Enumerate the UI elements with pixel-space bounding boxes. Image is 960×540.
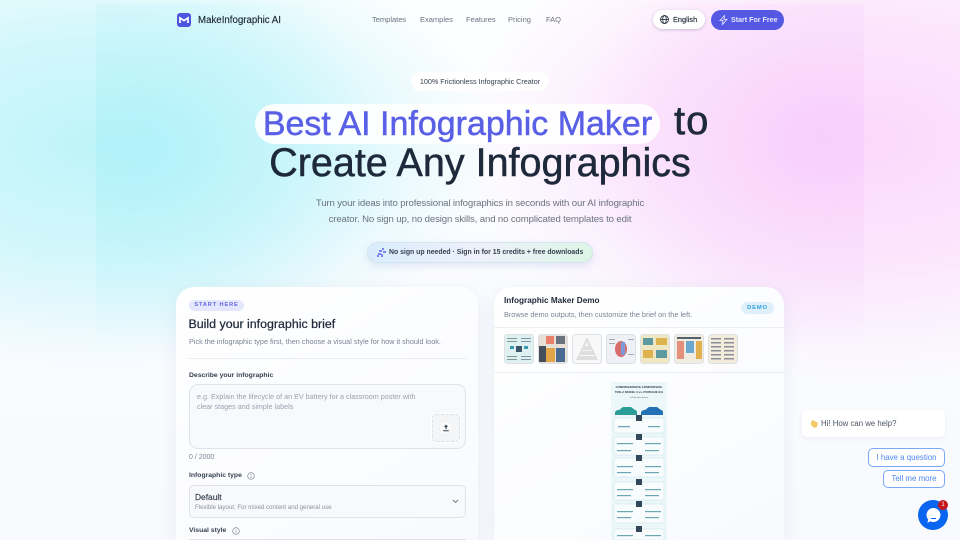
chat option: tell me more: Tell me more	[891, 474, 937, 483]
start here tag	[189, 300, 244, 311]
prompt textarea	[189, 384, 466, 449]
type label: Infographic type	[189, 472, 242, 479]
highlighted title phrase: Best AI Infographic Maker	[263, 105, 652, 143]
title: Create Any Infographics	[269, 141, 691, 185]
thumbnail 4	[606, 334, 636, 364]
icon: sparkles	[377, 248, 386, 257]
prompt textarea: e.g. Explain the lifecycle of an EV battery for a classroom poster with	[197, 392, 416, 401]
thumbnail 5	[640, 334, 670, 364]
demo infographic preview: In-Depth Spec Analysis	[630, 396, 648, 399]
icon: globe	[660, 15, 669, 24]
icon: waving hand	[811, 420, 818, 428]
panel: build brief	[176, 287, 478, 540]
badge: 100% Frictionless Infographic Creator	[420, 77, 540, 86]
chat option: question	[868, 448, 945, 467]
thumbnail strip	[504, 334, 738, 364]
sign-up notice pill	[367, 242, 593, 263]
section icons	[636, 415, 642, 532]
panel description: Pick the infographic type first, then choose a visual style for how it should look.	[189, 337, 441, 346]
character counter: 0 / 2000	[189, 454, 214, 461]
row accents	[617, 426, 661, 536]
thumbnail 2	[538, 334, 568, 364]
thumbnail 7	[708, 334, 738, 364]
subtitle	[316, 198, 644, 225]
nav links: FAQ	[546, 15, 561, 24]
comparison rows	[614, 418, 664, 540]
nav links: Pricing	[508, 15, 531, 24]
panel: demo	[494, 287, 784, 540]
demo infographic preview: COMPREHENSIVE COMPARISON:	[616, 385, 662, 389]
icon: chevron	[452, 500, 458, 503]
prompt textarea: clear stages and simple labels	[197, 402, 293, 411]
style label: Visual style	[189, 527, 226, 534]
demo infographic preview: TESLA MODEL 3 vs. PORSCHE 911	[615, 390, 664, 394]
language button: English	[673, 15, 697, 24]
chat greeting bubble	[802, 410, 945, 437]
prompt label: Describe your infographic	[189, 372, 273, 379]
thumbnail 3	[572, 334, 602, 364]
thumbnail 1	[504, 334, 534, 364]
icon: spark	[719, 15, 728, 25]
demo infographic preview	[611, 382, 667, 540]
start button: Start For Free	[731, 16, 778, 24]
type select	[189, 485, 466, 518]
car illustrations	[615, 407, 663, 415]
icon: info	[232, 527, 240, 535]
notification badge	[938, 500, 948, 510]
sign-up notice pill: No sign up needed · Sign in for 15 credits + free downloads	[389, 248, 583, 256]
type select: Default	[195, 492, 222, 502]
chat option: question: I have a question	[876, 453, 937, 462]
title: to	[674, 99, 709, 143]
navigation bar	[177, 10, 784, 32]
thumbnail 6	[674, 334, 704, 364]
title	[255, 99, 709, 185]
chat option: tell me more	[883, 470, 945, 488]
chat launcher	[918, 500, 948, 530]
demo tag	[741, 302, 774, 314]
start button	[711, 10, 784, 30]
icon: speech bubble	[926, 508, 940, 523]
notification badge: 1	[941, 502, 945, 508]
demo description: Browse demo outputs, then customize the brief on the left.	[504, 310, 692, 319]
logo icon	[177, 13, 191, 27]
demo heading: Infographic Maker Demo	[504, 296, 600, 305]
start here tag: START HERE	[194, 302, 239, 308]
type select: Flexible layout; For mixed content and general use	[195, 504, 332, 511]
brand name: MakeInfographic AI	[198, 14, 281, 26]
subtitle: creator. No sign up, no design skills, and no complicated templates to edit	[329, 214, 631, 225]
nav links: Examples	[420, 15, 453, 24]
upload button	[432, 414, 460, 442]
panel heading: Build your infographic brief	[188, 317, 335, 331]
subtitle: Turn your ideas into professional infographics in seconds with our AI infographic	[316, 198, 644, 209]
nav links: Templates	[372, 15, 406, 24]
icon: info	[247, 472, 255, 480]
icon: upload	[440, 422, 452, 434]
demo tag: DEMO	[747, 305, 768, 311]
nav links	[372, 15, 561, 24]
language button	[653, 10, 705, 29]
badge	[411, 72, 549, 91]
chat greeting bubble: Hi! How can we help?	[821, 419, 896, 428]
nav links: Features	[466, 15, 496, 24]
